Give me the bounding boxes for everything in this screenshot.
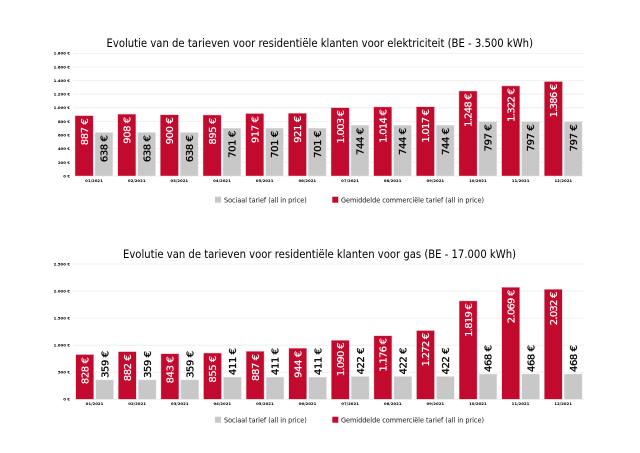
bars: 05/2021 gas: 05/2021 [256,401,274,406]
bars: 09/2021 gas: 09/2021 [426,401,444,406]
legend: gas: Gemiddelde commerciële tarief (all in price) [341,416,484,424]
bars: 07/2021 electricity: 07/2021 [341,178,359,183]
y axis labels: gas: 1.000 € [54,343,70,348]
legend: electricity: Gemiddelde commerciële tarief (all in price) [341,196,484,204]
y axis labels: electricity: 0 € [63,173,70,178]
bars: 06/2021 gas: 944 € [293,351,304,378]
bars: 08/2021 gas [374,336,412,406]
bars: 06/2021 electricity: 06/2021 [298,178,316,183]
bars: 02/2021 electricity: 908 € [122,117,134,144]
bars: 08/2021 gas: 08/2021 [384,401,402,406]
bars: 07/2021 electricity: 1.003 € [336,110,347,144]
bars: 04/2021 electricity [203,115,241,183]
bars: 11/2021 electricity: 797 € [526,125,537,151]
bars: 11/2021 gas: 468 € [526,345,537,372]
bars: 07/2021 gas: 422 € [356,348,367,374]
bars: 10/2021 electricity: 10/2021 [469,178,487,183]
bars: 12/2021 gas: 2.032 € [549,292,560,325]
bars: 11/2021 electricity: 11/2021 [512,178,530,183]
bars: 03/2021 gas: 03/2021 [171,401,189,406]
bars: 03/2021 gas: 359 € [186,351,196,378]
bars: 09/2021 electricity: 1.017 € [421,109,432,143]
panel: gas chart [54,247,584,424]
bars: 07/2021 electricity: 744 € [356,128,367,155]
bars: 09/2021 electricity [416,107,454,183]
bars: 03/2021 electricity: 638 € [185,135,196,162]
bars: 04/2021 electricity: 895 € [208,118,219,145]
bars: 06/2021 electricity [288,113,326,183]
y axis labels: electricity: 1.600 € [54,64,70,69]
bars: 10/2021 gas: 468 € [484,345,495,372]
y axis labels: gas: 1.500 € [54,316,70,320]
bars: 08/2021 electricity: 744 € [398,128,409,155]
bars: 06/2021 gas: 06/2021 [299,401,317,406]
bars: 12/2021 electricity: 1.386 € [549,84,560,117]
bars: 03/2021 electricity: 03/2021 [170,178,188,183]
bars: 05/2021 electricity: 917 € [250,116,261,143]
bars: 06/2021 gas: 411 € [313,348,324,375]
bars: 03/2021 gas: 843 € [166,357,177,383]
y axis labels: electricity: 200 € [58,160,70,165]
bars: 07/2021 gas [331,340,369,406]
bars: 10/2021 electricity: 797 € [484,125,494,151]
bars: 01/2021 electricity [75,116,113,183]
bars: 01/2021 electricity: 638 € [100,135,111,162]
y axis labels: gas: 2.500 € [54,261,70,266]
bars: 11/2021 gas [502,287,540,406]
bars: 09/2021 gas: 422 € [441,348,452,374]
bars: 05/2021 electricity: 05/2021 [256,178,274,183]
y axis labels: gas [54,261,70,402]
bars: 04/2021 gas: 411 € [228,348,239,375]
bars: 01/2021 electricity: 01/2021 [85,178,103,183]
bars: 08/2021 electricity: 08/2021 [384,178,402,183]
bars: 05/2021 electricity: 701 € [270,131,281,158]
bars: 01/2021 electricity: 887 € [80,119,91,145]
title: electricity: Evolutie van de tarieven voor residentiële klanten voor elektriciteit (BE - 3.500 kWh) [106,36,533,50]
bars: 08/2021 gas: 1.176 € [379,338,390,372]
bars: 12/2021 electricity: 12/2021 [554,178,572,183]
bars: 12/2021 gas: 12/2021 [554,401,572,406]
y axis labels: electricity [54,51,70,178]
bars: 10/2021 gas: 1.819 € [464,304,475,337]
y axis labels: electricity: 1.200 € [54,92,70,97]
y axis labels: electricity: 1.400 € [54,78,70,83]
y axis labels: gas: 500 € [58,370,70,375]
bars: 04/2021 gas [204,348,241,406]
bars: 10/2021 electricity [459,91,497,183]
bars: 01/2021 gas [76,351,114,406]
bars: 11/2021 gas: 11/2021 [512,401,530,406]
y axis labels: gas: 0 € [63,397,70,402]
bars: 02/2021 gas: 02/2021 [128,401,146,406]
legend: electricity [215,196,484,204]
legend: electricity: Sociaal tarief (all in price) [224,196,307,204]
bars: 07/2021 gas: 1.090 € [336,343,347,376]
bars: 01/2021 gas: 01/2021 [86,401,104,406]
bars: 01/2021 gas: 828 € [80,357,91,384]
y axis labels: gas: 2.000 € [54,288,70,294]
bars: 01/2021 gas: 359 € [100,351,111,378]
bars: 08/2021 gas: 422 € [398,348,410,374]
bars: 03/2021 electricity [160,115,198,183]
bars: 02/2021 gas: 882 € [123,355,134,381]
bars: 06/2021 electricity: 921 € [293,116,304,143]
bars: 12/2021 gas: 468 € [569,345,580,372]
bars: 08/2021 electricity [374,107,411,183]
legend: gas [215,416,484,424]
bars: 02/2021 electricity [118,114,156,183]
bars: 07/2021 electricity [331,108,369,183]
bars: 02/2021 gas [118,351,156,406]
bars: 12/2021 electricity [544,82,582,183]
bars: 10/2021 gas: 10/2021 [469,401,487,406]
panel: electricity chart [54,36,584,204]
bars: 10/2021 electricity: 1.248 € [464,94,475,127]
y axis labels: electricity: 1.800 € [54,51,70,56]
y axis labels: electricity: 800 € [58,119,70,124]
bars: 04/2021 gas: 04/2021 [213,401,231,406]
bars: 03/2021 gas [161,351,199,406]
title: gas: Evolutie van de tarieven voor residentiële klanten voor gas (BE - 17.000 kWh) [123,247,516,261]
bars: 02/2021 electricity: 02/2021 [128,178,146,183]
bars: 12/2021 electricity: 797 € [569,125,580,151]
bars: 10/2021 gas [459,301,497,406]
bars: 09/2021 electricity: 09/2021 [426,178,444,183]
bars: 04/2021 electricity: 701 € [228,131,239,158]
bars: 08/2021 electricity: 1.014 € [378,110,389,143]
bars: 05/2021 gas: 887 € [251,354,262,381]
bars: 12/2021 gas [544,289,582,406]
bars: 04/2021 gas: 855 € [208,356,219,383]
bars: 11/2021 gas: 2.069 € [506,290,517,323]
bars: 09/2021 gas [416,330,454,406]
y axis labels: electricity: 600 € [58,132,70,138]
bars: 06/2021 electricity: 701 € [313,131,324,158]
bars: 02/2021 gas: 359 € [143,351,154,378]
bars: 09/2021 electricity: 744 € [441,128,452,155]
bars: 09/2021 gas: 1.272 € [421,333,432,366]
legend: gas: Sociaal tarief (all in price) [224,416,307,424]
bars: 11/2021 electricity [502,86,539,183]
bars: 04/2021 electricity: 04/2021 [213,178,231,183]
bars: 05/2021 gas: 411 € [271,348,282,375]
bars: 03/2021 electricity: 900 € [165,118,176,144]
bars: 02/2021 electricity: 638 € [142,135,153,162]
y axis labels: electricity: 400 € [58,146,70,151]
bars: 07/2021 gas: 07/2021 [341,401,359,406]
bars: 05/2021 electricity [246,114,283,183]
y axis labels: electricity: 1.000 € [54,105,70,110]
bars: 05/2021 gas [246,348,284,406]
bars: 11/2021 electricity: 1.322 € [506,89,517,122]
bars: 06/2021 gas [289,348,326,406]
